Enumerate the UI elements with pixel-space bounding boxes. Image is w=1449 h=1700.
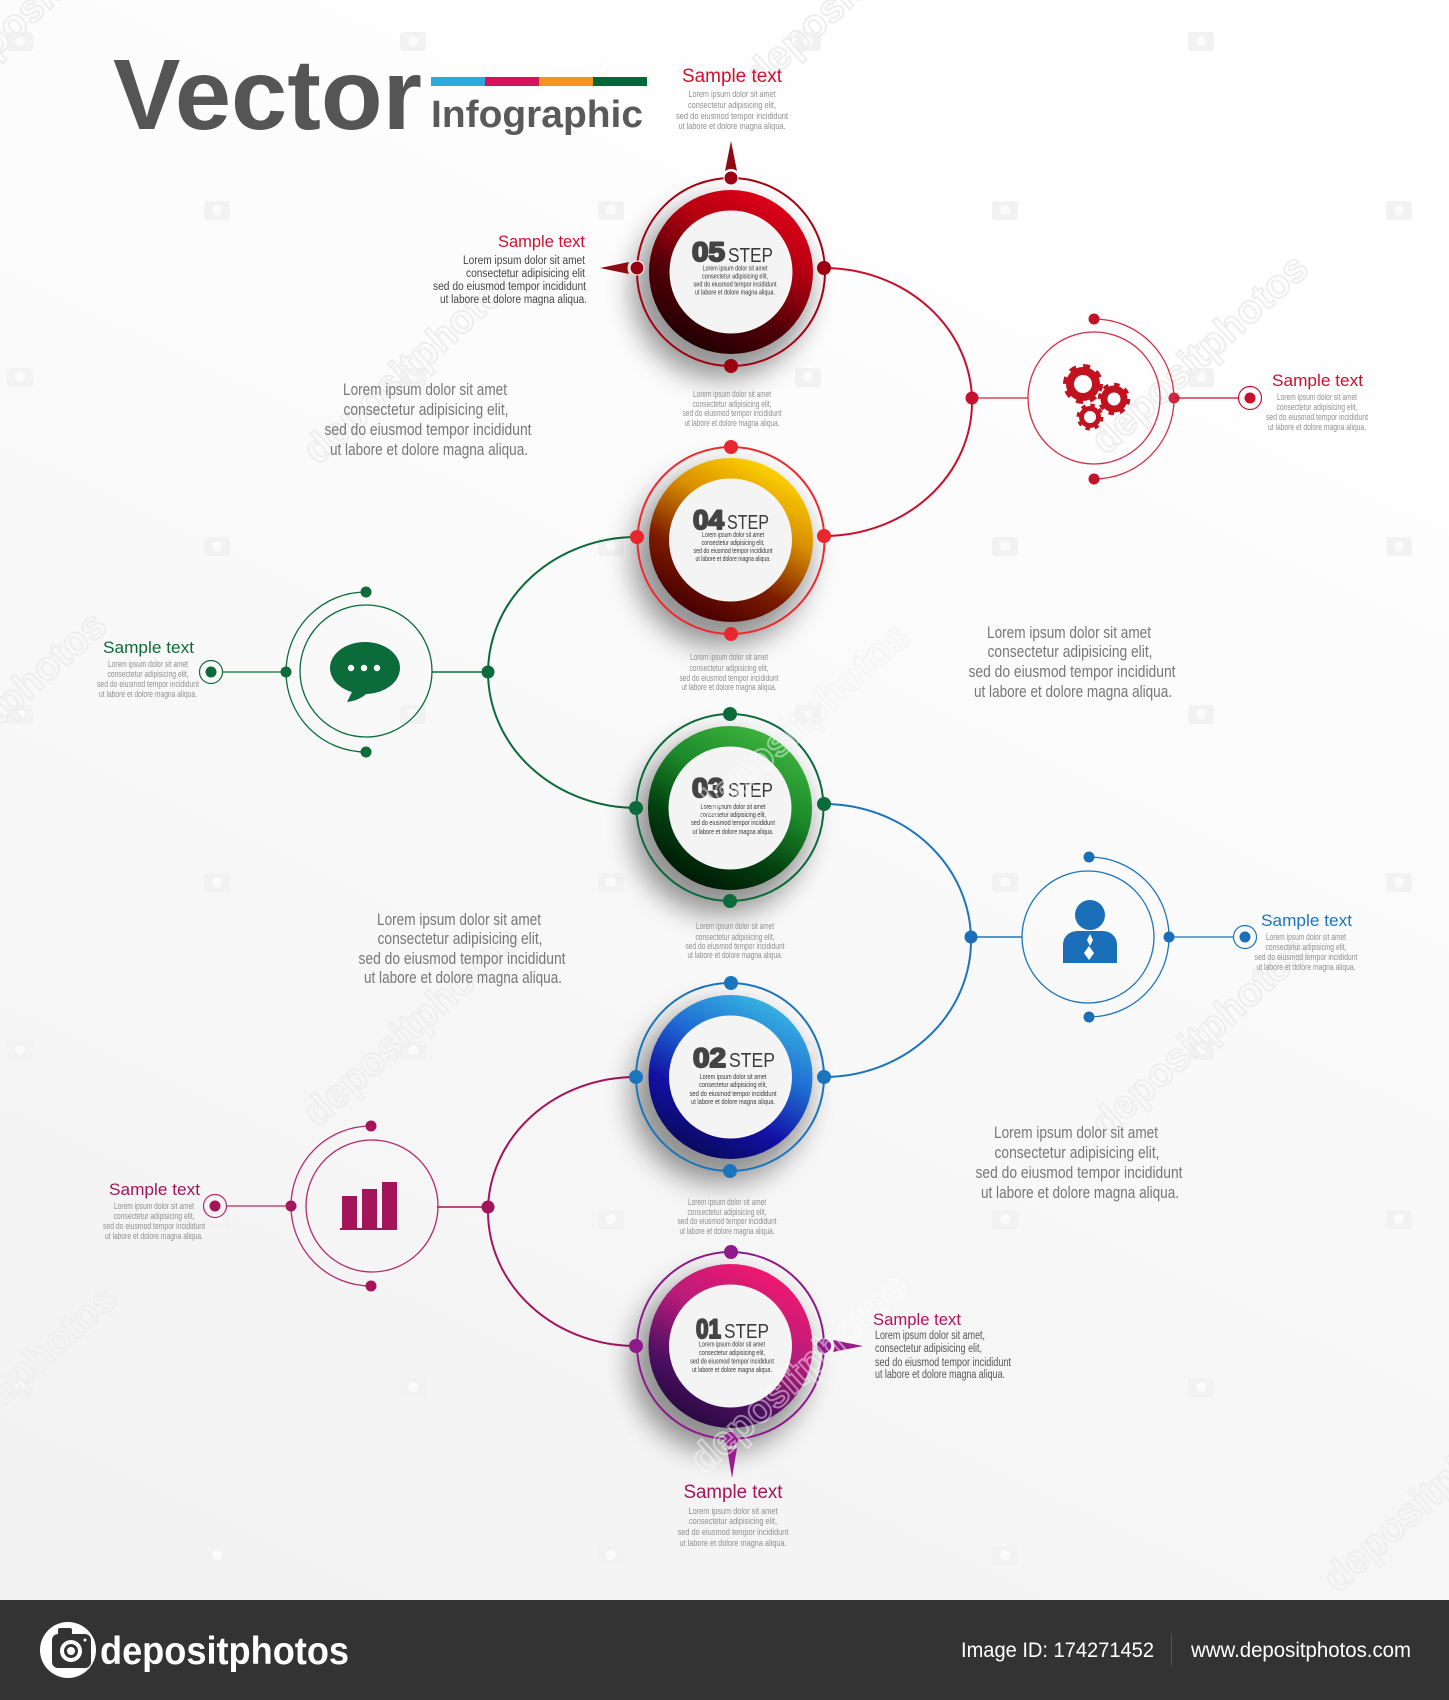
step text: sed do eiusmod tempor incididunt <box>691 818 776 827</box>
callout: gears: Sample text <box>1272 371 1363 390</box>
panel: chat node <box>200 586 494 758</box>
step text: Lorem ipsum dolor sit amet <box>702 264 768 272</box>
callout: gears: consectetur adipisicing elit, <box>1276 402 1358 413</box>
text block: lower left <box>358 910 566 987</box>
text block: lower left: consectetur adipisicing elit, <box>378 929 542 948</box>
text block: upper left: ut labore et dolore magna aliqua. <box>330 440 528 459</box>
text block: lower left: ut labore et dolore magna aliqua. <box>364 968 562 987</box>
step text: consectetur adipisicing elit, <box>699 1080 767 1089</box>
title word: Infographic: Infographic <box>431 94 643 136</box>
callout: bar chart: Lorem ipsum dolor sit amet <box>114 1201 194 1212</box>
step text: Lorem ipsum dolor sit amet <box>702 530 765 539</box>
website: www.depositphotos.com <box>1190 1639 1411 1662</box>
text block: below step 05: sed do eiusmod tempor incididunt <box>682 408 782 419</box>
text block: lower right: sed do eiusmod tempor incididunt <box>976 1163 1183 1182</box>
connector arcs <box>488 268 972 1346</box>
title word: Vector: Vector <box>113 39 422 151</box>
text block: below step 02: consectetur adipisicing elit, <box>688 1207 766 1218</box>
text block: below step 02: Lorem ipsum dolor sit amet <box>688 1197 766 1208</box>
panel: step 02 <box>629 976 831 1183</box>
callout: step 01 right: sed do eiusmod tempor incididunt <box>875 1357 1012 1369</box>
text block: lower right: ut labore et dolore magna aliqua. <box>981 1183 1179 1202</box>
callout: step 01 bottom <box>678 1482 789 1549</box>
step text <box>694 530 773 563</box>
step label: STEP <box>729 1050 775 1072</box>
step text <box>690 1340 775 1374</box>
text: depositphotos <box>1083 929 1317 1146</box>
step number 03: 03 <box>692 773 724 803</box>
text block: upper left: Lorem ipsum dolor sit amet <box>343 380 507 399</box>
text: depositphotos <box>295 256 529 473</box>
step label: STEP <box>728 245 773 267</box>
step number 04: 04 <box>693 505 724 535</box>
callout: person <box>1254 911 1358 973</box>
step text: sed do eiusmod tempor incididunt <box>694 546 773 555</box>
text block: below step 02: sed do eiusmod tempor incididunt <box>678 1216 777 1227</box>
callout: person: Lorem ipsum dolor sit amet <box>1266 932 1346 943</box>
text block: below step 03: sed do eiusmod tempor incididunt <box>686 941 785 952</box>
text block: below step 03: ut labore et dolore magna aliqua. <box>688 950 782 961</box>
step label: STEP <box>727 512 769 534</box>
text block: lower right: Lorem ipsum dolor sit amet <box>994 1123 1158 1142</box>
callout: step 05 left: sed do eiusmod tempor incididunt <box>433 281 587 293</box>
text block: below step 04: Lorem ipsum dolor sit amet <box>690 652 768 663</box>
step number 05: 05 <box>692 237 725 267</box>
text: depositphotos <box>682 1265 916 1482</box>
callout: step 05 top: consectetur adipisicing elit, <box>688 100 776 111</box>
text block: upper left <box>324 380 532 459</box>
callout: step 05 top: Sample text <box>682 66 783 87</box>
panel: person node <box>964 852 1256 1022</box>
callout: bar chart <box>103 1180 205 1242</box>
step text: ut labore et dolore magna aliqua. <box>691 1097 775 1106</box>
text block: lower right <box>976 1123 1183 1202</box>
text block: lower left: Lorem ipsum dolor sit amet <box>377 910 541 929</box>
text block: below step 03: consectetur adipisicing elit, <box>696 932 774 943</box>
callout: chat: sed do eiusmod tempor incididunt <box>97 679 199 690</box>
image id: Image ID: 174271452 <box>961 1639 1154 1662</box>
text block: below step 04: ut labore et dolore magna aliqua. <box>682 682 776 693</box>
callout: step 01 bottom: consectetur adipisicing elit, <box>689 1516 777 1527</box>
text block: upper left: sed do eiusmod tempor incididunt <box>324 420 532 439</box>
callout: step 01 right: Lorem ipsum dolor sit amet, <box>875 1330 985 1342</box>
callout: chat: Sample text <box>103 638 194 657</box>
text block: below step 02: ut labore et dolore magna aliqua. <box>680 1226 774 1237</box>
text block: below step 05: ut labore et dolore magna aliqua. <box>684 418 780 429</box>
callout: step 01 right: ut labore et dolore magna aliqua. <box>875 1369 1005 1381</box>
callout: gears: Lorem ipsum dolor sit amet <box>1277 392 1357 403</box>
logo wordmark: depositphotos <box>100 1630 349 1673</box>
text block: below step 04 <box>680 652 779 693</box>
step number 02: 02 <box>693 1043 726 1073</box>
title colour bar <box>431 77 647 86</box>
panel: step 04 <box>630 440 831 646</box>
callout: bar chart: Sample text <box>109 1180 200 1199</box>
callout: gears: sed do eiusmod tempor incididunt <box>1266 412 1368 423</box>
text block: right of step 04: consectetur adipisicing elit, <box>988 642 1152 661</box>
step text: sed do eiusmod tempor incididunt <box>690 1356 775 1366</box>
step text: ut labore et dolore magna aliqua. <box>692 1365 772 1374</box>
callout: step 01 bottom: ut labore et dolore magna aliqua. <box>680 1538 786 1549</box>
step text: ut labore et dolore magna aliqua. <box>696 554 770 563</box>
title <box>113 39 647 151</box>
text block: below step 05 <box>682 389 782 429</box>
callout: step 01 bottom: Sample text <box>684 1482 783 1503</box>
text block: below step 05: Lorem ipsum dolor sit amet <box>693 389 771 400</box>
step text: Lorem ipsum dolor sit amet <box>700 802 766 811</box>
text block: right of step 04: sed do eiusmod tempor incididunt <box>968 662 1176 681</box>
callout: bar chart: consectetur adipisicing elit, <box>114 1211 194 1222</box>
step text: consectetur adipisicing elit, <box>702 272 768 280</box>
callout: person: ut labore et dolore magna aliqua. <box>1256 962 1356 973</box>
text block: below step 03: Lorem ipsum dolor sit amet <box>696 921 774 932</box>
callout: person: sed do eiusmod tempor incididunt <box>1254 952 1358 963</box>
callout: step 05 top: ut labore et dolore magna aliqua. <box>678 121 786 132</box>
callout: step 05 left: Lorem ipsum dolor sit amet <box>463 255 586 267</box>
callout: step 05 top <box>676 66 788 132</box>
step text <box>691 802 776 836</box>
step label: STEP <box>728 780 773 802</box>
step text: Lorem ipsum dolor sit amet <box>700 1072 767 1081</box>
step text: Lorem ipsum dolor sit amet <box>699 1340 766 1348</box>
step text <box>690 1072 777 1106</box>
callout: person: Sample text <box>1261 911 1352 930</box>
callout: bar chart: sed do eiusmod tempor incididunt <box>103 1221 205 1232</box>
icon: camera logo <box>40 1622 96 1678</box>
text block: lower right: consectetur adipisicing elit, <box>994 1143 1160 1162</box>
text block: right of step 04 <box>968 623 1176 701</box>
callout: step 01 right <box>873 1310 1012 1381</box>
text: depositphotos <box>684 614 918 831</box>
panel: step 05 <box>600 141 831 378</box>
text: depositphotos <box>684 614 918 831</box>
step text: sed do eiusmod tempor incididunt <box>694 280 777 288</box>
callout: gears <box>1266 371 1368 433</box>
step text <box>694 264 777 296</box>
step text: sed do eiusmod tempor incididunt <box>690 1089 777 1098</box>
step text: consectetur adipisicing elit, <box>700 810 766 819</box>
panel: bar chart node <box>204 1120 494 1292</box>
text block: upper left: consectetur adipisicing elit, <box>344 400 508 419</box>
panel: gears node <box>966 314 1262 484</box>
callout: step 01 bottom: Lorem ipsum dolor sit amet <box>688 1506 778 1517</box>
callout: step 05 top: sed do eiusmod tempor incididunt <box>676 111 788 122</box>
text block: below step 04: sed do eiusmod tempor incididunt <box>680 673 779 684</box>
callout: step 01 bottom: sed do eiusmod tempor incididunt <box>678 1527 789 1538</box>
arrow: right pointer <box>833 1340 863 1352</box>
callout: bar chart: ut labore et dolore magna aliqua. <box>105 1231 203 1242</box>
text block: right of step 04: Lorem ipsum dolor sit amet <box>987 623 1151 642</box>
icon: bar chart <box>340 1182 397 1230</box>
step label: STEP <box>724 1321 769 1343</box>
text block: below step 02 <box>678 1197 777 1237</box>
panel: step 03 <box>629 707 831 914</box>
step number 01: 01 <box>696 1314 721 1344</box>
callout: step 01 right: Sample text <box>873 1310 961 1329</box>
callout: gears: ut labore et dolore magna aliqua. <box>1268 422 1366 433</box>
text: depositphotos <box>1083 246 1317 463</box>
callout: step 05 left: ut labore et dolore magna aliqua. <box>440 294 587 306</box>
panel: step 01 <box>629 1245 863 1478</box>
callout: person: consectetur adipisicing elit, <box>1266 942 1346 953</box>
callout: step 05 left: Sample text <box>498 232 585 251</box>
arrow: left pointer <box>600 262 629 274</box>
step text: consectetur adipisicing elit, <box>699 1348 765 1357</box>
callout: chat: consectetur adipisicing elit, <box>108 669 188 680</box>
arrow: bottom pointer <box>727 1448 737 1478</box>
step text: ut labore et dolore magna aliqua. <box>695 288 775 296</box>
arrow: top pointer <box>725 141 737 171</box>
text block: below step 04: consectetur adipisicing elit, <box>690 663 768 674</box>
callout: step 01 right: consectetur adipisicing elit, <box>875 1343 982 1355</box>
icon: speech bubble <box>330 642 400 702</box>
text block: below step 03 <box>686 921 785 961</box>
step text: consectetur adipisicing elit, <box>702 538 764 547</box>
callout: step 05 left: consectetur adipisicing elit <box>466 268 586 280</box>
step text: ut labore et dolore magna aliqua. <box>692 827 774 836</box>
text block: below step 05: consectetur adipisicing elit, <box>692 399 772 410</box>
callout: step 05 top: Lorem ipsum dolor sit amet <box>688 89 776 100</box>
icon: person <box>1063 900 1117 963</box>
callout: step 05 left <box>433 232 587 306</box>
callout: chat: ut labore et dolore magna aliqua. <box>99 689 197 700</box>
icon: gears <box>1065 366 1128 429</box>
callout: chat <box>97 638 199 700</box>
text block: right of step 04: ut labore et dolore magna aliqua. <box>974 682 1172 701</box>
footer band <box>0 1600 1449 1700</box>
text block: lower left: sed do eiusmod tempor incididunt <box>358 949 566 968</box>
callout: chat: Lorem ipsum dolor sit amet <box>108 659 188 670</box>
text: depositphotos <box>295 918 529 1135</box>
